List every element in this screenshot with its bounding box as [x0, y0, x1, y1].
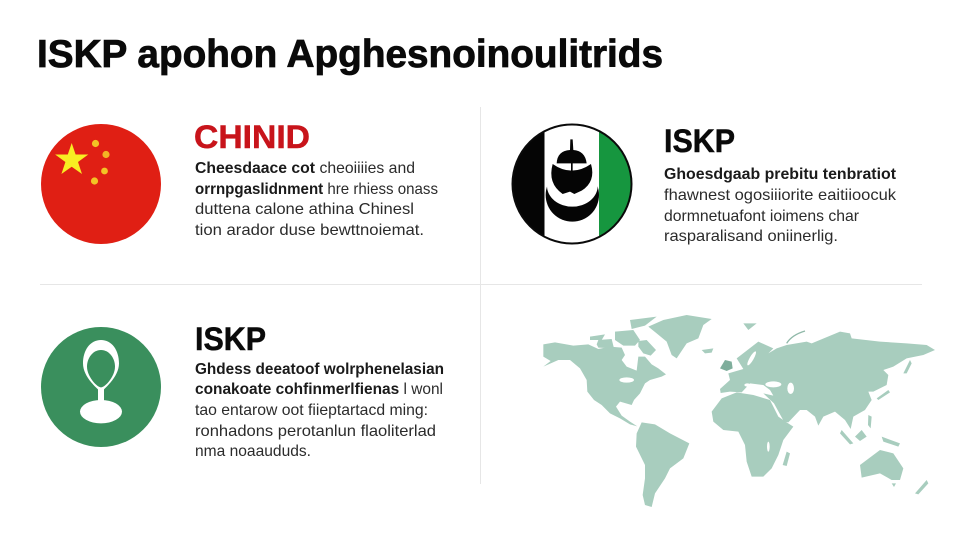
text block: ISKP description: rasparalisand oniinerlig. — [664, 228, 838, 245]
text block: ISKP description: fhawnest ogosiiiorite eaitiioocuk — [664, 187, 897, 204]
title: ISKP apohon Apghesnoinoulitrids — [37, 33, 663, 76]
heading: CHINID: CHINID — [194, 119, 310, 155]
icon: China flag circle — [41, 124, 161, 244]
panel: China — [41, 119, 438, 244]
text block: China description: tion arador duse bewttnoiemat. — [195, 222, 424, 239]
heading: ISKP: ISKP — [195, 321, 266, 357]
text block: person description: Ghdess deeatoof wolrphenelasian — [195, 361, 444, 378]
text block: person description — [195, 361, 444, 460]
text block: person description: ronhadons perotanlun flaoliterlad — [195, 423, 436, 440]
panel: ISKP person — [41, 321, 444, 460]
text block: person description: tao entarow oot fiieptartacd ming: — [195, 402, 428, 419]
text block: person description: conakoate cohfinmerlfienas l wonl — [195, 381, 443, 398]
text block: China description — [195, 160, 438, 239]
text block: China description: Cheesdaace cot cheoiiiies and — [195, 160, 415, 177]
text block: China description: duttena calone athina Chinesl — [195, 201, 414, 218]
world map — [543, 315, 935, 507]
icon: green person circle — [41, 327, 161, 447]
text block: ISKP description — [664, 166, 897, 245]
text block: ISKP description: Ghoesdgaab prebitu tenbratiot — [664, 166, 897, 183]
heading: ISKP: ISKP — [664, 123, 735, 159]
text block: China description: orrnpgaslidnment hre rhiess onass — [195, 181, 438, 198]
text block: ISKP description: dormnetuafont ioimens char — [664, 208, 860, 225]
icon: ISKP emblem circle — [510, 122, 634, 246]
panel: ISKP emblem — [510, 122, 897, 246]
text block: person description: nma noaaududs. — [195, 443, 311, 460]
